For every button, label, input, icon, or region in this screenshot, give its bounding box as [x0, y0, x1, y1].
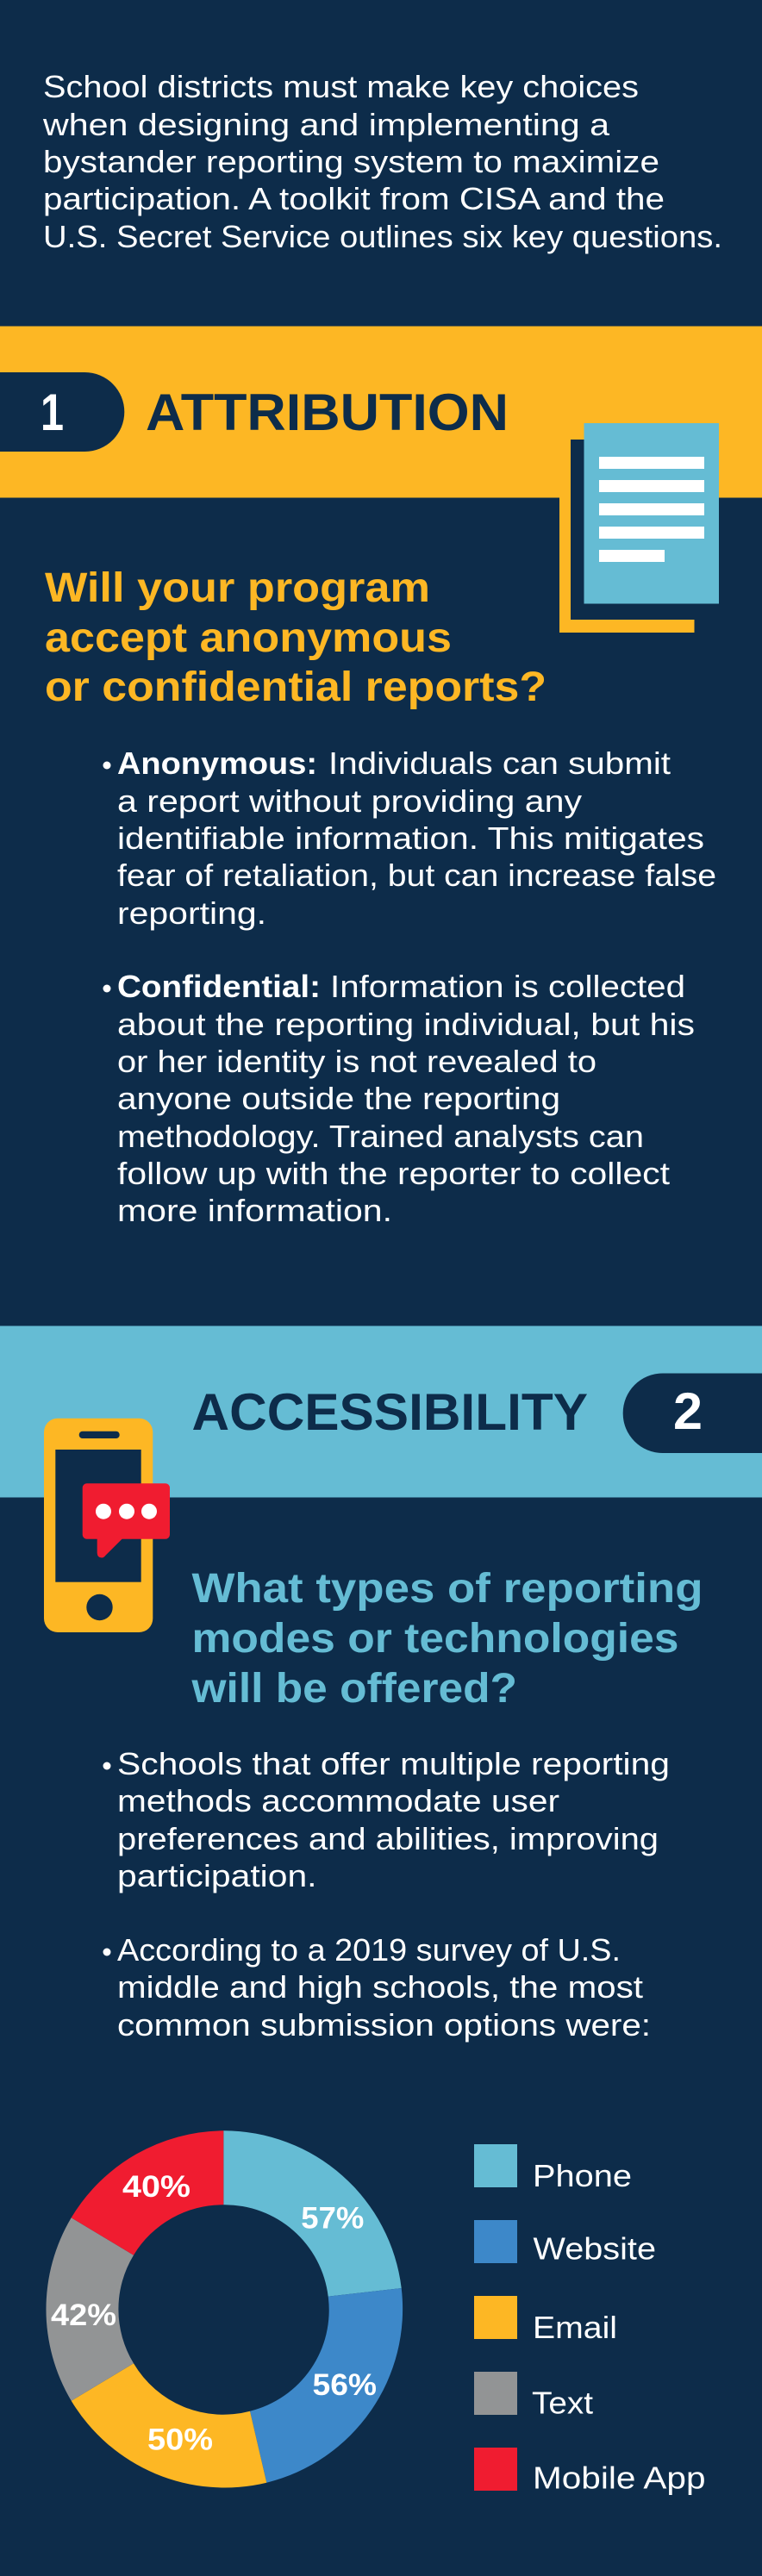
intro text: when designing and implementing a: [42, 107, 610, 142]
legend item: phone: [474, 2144, 632, 2193]
bullet: confidential: about the reporting individual, but his: [117, 1007, 695, 1042]
bullet: anonymous: reporting.: [117, 895, 266, 931]
legend item: website: Website: [533, 2230, 656, 2267]
bullet: anonymous: identifiable information. This mitigates: [117, 820, 704, 856]
legend item: mobile app: Mobile App: [533, 2460, 705, 2496]
donut chart: 50%: [147, 2423, 213, 2456]
bullet: anonymous: Individuals can submit: [328, 745, 671, 781]
bullet: confidential: Confidential:: [117, 969, 321, 1004]
donut chart: 42%: [51, 2298, 116, 2332]
bullet: multiple reporting methods: Schools that offer multiple reporting: [117, 1746, 670, 1781]
legend item: email: Email: [533, 2310, 617, 2345]
intro text: participation. A toolkit from CISA and the: [43, 181, 665, 216]
legend item: email: [474, 2296, 617, 2345]
legend item: text: Text: [532, 2386, 593, 2420]
intro text: U.S. Secret Service outlines six key questions.: [43, 219, 722, 254]
number pill 1: 1: [41, 384, 64, 441]
panel: accessibility header band: [0, 1325, 762, 1498]
bullet: anonymous: Anonymous:: [117, 745, 317, 781]
bullet: 2019 survey: common submission options were:: [117, 2007, 651, 2043]
donut chart: 40%: [122, 2170, 190, 2204]
donut chart: 57%: [301, 2201, 364, 2235]
legend: [474, 2144, 705, 2496]
bullet: confidential: follow up with the reporter to collect: [117, 1156, 670, 1191]
panel: attribution header band: [0, 326, 762, 498]
legend item: website: [474, 2220, 656, 2267]
bullet: confidential: Information is collected: [330, 969, 685, 1004]
bullet: multiple reporting methods: participation.: [117, 1858, 317, 1893]
question heading 1: [45, 565, 547, 710]
bullet: multiple reporting methods: [103, 1746, 670, 1893]
bullet: multiple reporting methods: methods accommodate user: [117, 1783, 559, 1818]
question heading 1: accept anonymous: [45, 615, 452, 661]
bullet: 2019 survey: middle and high schools, the most: [117, 1969, 643, 2005]
bullet: 2019 survey: [103, 1932, 651, 2043]
bullet: 2019 survey: According to a 2019 survey of U.S.: [117, 1932, 621, 1968]
intro text: [42, 69, 722, 254]
question heading 2: will be offered?: [190, 1666, 517, 1712]
number pill 2: [623, 1374, 762, 1453]
legend item: phone: Phone: [533, 2158, 632, 2193]
number pill 1: [0, 372, 124, 452]
question heading 2: [190, 1566, 703, 1712]
bullet: anonymous: fear of retaliation, but can increase false: [117, 858, 716, 893]
bullet: confidential: more information.: [117, 1193, 392, 1228]
heading: attribution: ATTRIBUTION: [146, 384, 509, 441]
heading: accessibility: ACCESSIBILITY: [191, 1383, 588, 1441]
legend item: mobile app: [474, 2448, 705, 2496]
bullet: anonymous: a report without providing any: [117, 783, 582, 819]
question heading 1: or confidential reports?: [45, 664, 547, 710]
bullet: confidential: [103, 969, 695, 1228]
bullet: multiple reporting methods: preferences and abilities, improving: [117, 1821, 659, 1856]
question heading 2: What types of reporting: [191, 1566, 703, 1612]
bullet: confidential: or her identity is not revealed to: [117, 1044, 596, 1079]
question heading 2: modes or technologies: [191, 1616, 679, 1662]
donut chart: [46, 2130, 403, 2487]
donut chart: 56%: [312, 2368, 377, 2402]
intro text: School districts must make key choices: [43, 69, 639, 104]
bullet: anonymous: [103, 745, 716, 931]
icon: document: [559, 423, 719, 633]
bullet: confidential: methodology. Trained analysts can: [117, 1119, 644, 1154]
icon: phone with message bubble: [44, 1419, 170, 1632]
intro text: bystander reporting system to maximize: [43, 144, 659, 179]
legend item: text: [474, 2372, 593, 2420]
number pill 2: 2: [673, 1382, 703, 1440]
question heading 1: Will your program: [45, 565, 430, 611]
bullet: confidential: anyone outside the reporting: [117, 1081, 560, 1116]
